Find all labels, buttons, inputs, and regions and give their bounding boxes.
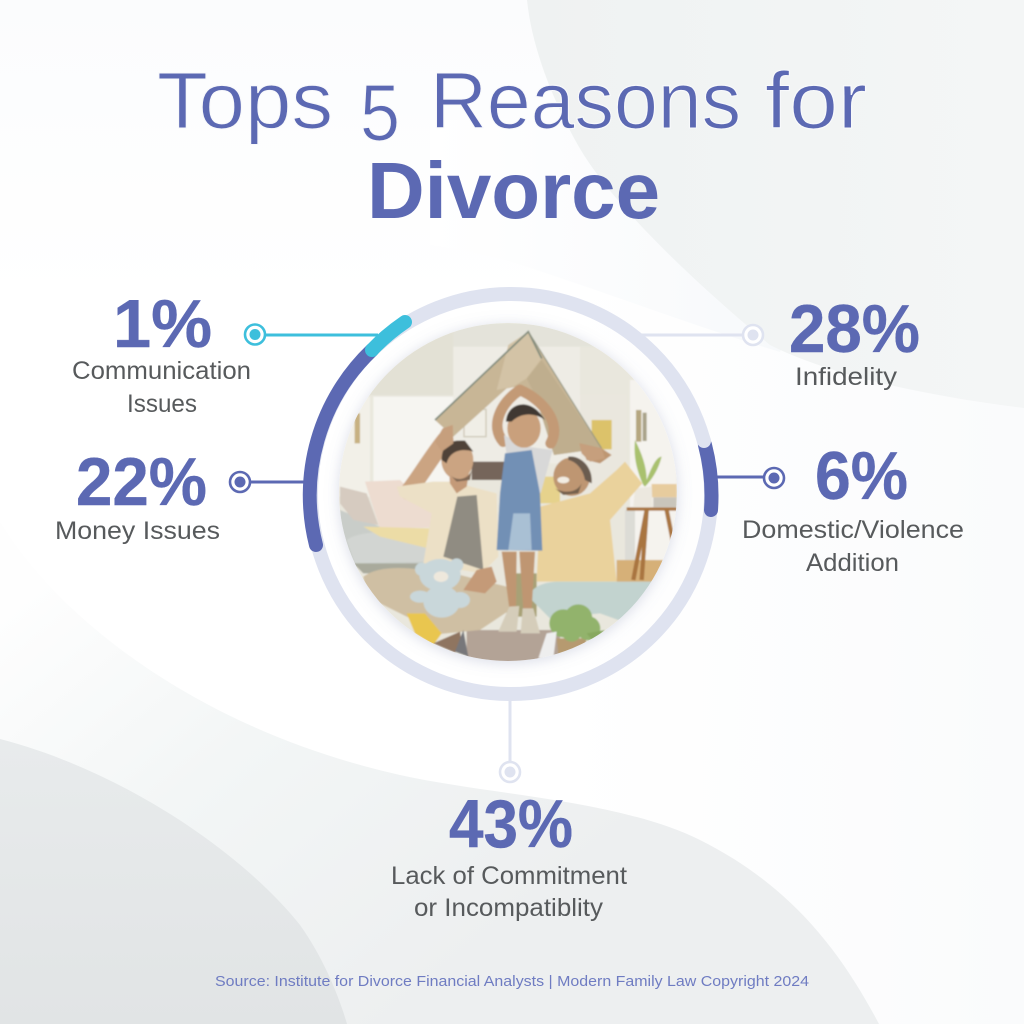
node (764, 468, 784, 488)
hands on knee (463, 567, 497, 593)
title line one: Tops (157, 56, 333, 145)
node (743, 325, 763, 345)
item: 43% lack of commitment (391, 762, 627, 922)
cardboard roof (435, 332, 602, 455)
arc: communication issues 1% (372, 322, 405, 350)
room background (333, 320, 683, 670)
label: or Incompatiblity (414, 894, 604, 922)
item: 1% communication issues (72, 286, 265, 418)
item: 6% domestic violence addition (742, 438, 964, 577)
hands on roof (435, 425, 605, 462)
sofa and cushions (340, 480, 635, 573)
arc cap: infidelity end (697, 434, 711, 448)
photo: family under cardboard roof (333, 320, 683, 670)
label: Money Issues (55, 517, 220, 545)
value: 1% (113, 286, 212, 362)
label: Infidelity (795, 363, 898, 391)
label: Communication (72, 357, 251, 385)
value: 22% (76, 444, 207, 520)
title line one: Reasons (430, 56, 741, 145)
item: 28% infidelity (743, 291, 920, 391)
item: 22% money issues (55, 444, 250, 545)
arc: money issues 22% (310, 350, 372, 545)
title line two: Divorce (367, 146, 660, 235)
side table and plant (627, 440, 677, 580)
teddy bear (410, 558, 470, 618)
right man (528, 443, 653, 627)
node (500, 762, 520, 782)
label: Domestic/Violence (742, 516, 964, 544)
node (245, 324, 265, 344)
title line one: 5 (360, 68, 400, 157)
title (157, 56, 867, 235)
potted plant (538, 604, 605, 658)
value: 28% (789, 291, 920, 367)
donut ring chart (310, 294, 712, 694)
label: Issues (127, 390, 197, 418)
source line: Source: Institute for Divorce Financial Analysts | Modern Family Law Copyright 2024 (215, 973, 809, 990)
value: 6% (815, 438, 908, 514)
floor and rug (466, 559, 663, 661)
label: Lack of Commitment (391, 862, 627, 890)
left man (363, 425, 510, 657)
girl (497, 390, 554, 633)
label: Addition (806, 549, 899, 577)
value: 43% (449, 786, 573, 862)
title line one: for (765, 56, 867, 145)
connector lines (250, 335, 765, 762)
node (230, 472, 250, 492)
arc: domestic violence 6% (705, 445, 712, 510)
ring track (311, 294, 711, 694)
